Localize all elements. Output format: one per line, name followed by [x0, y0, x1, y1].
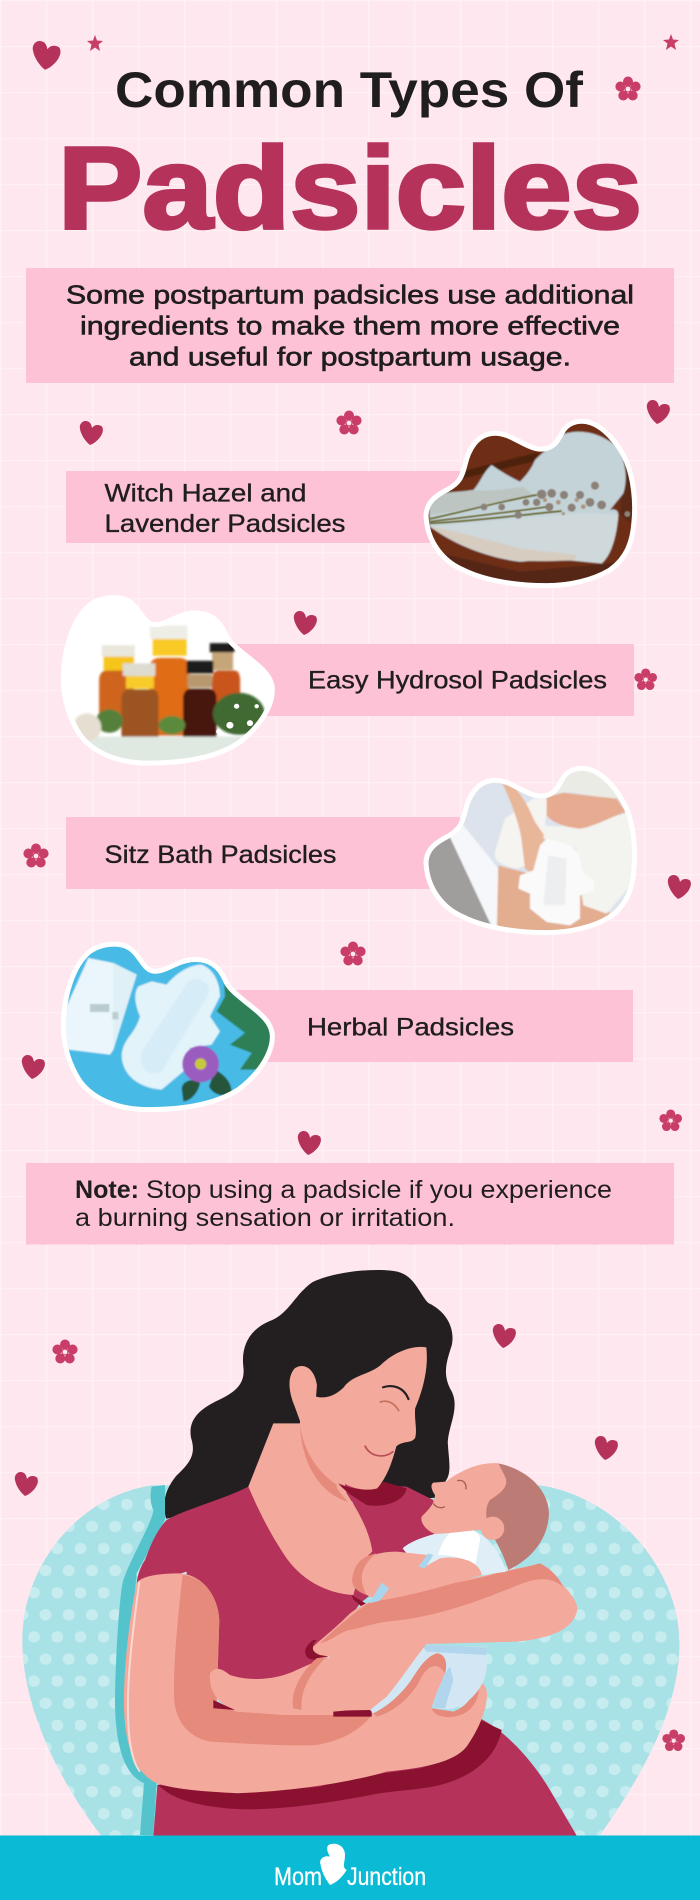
dress top: [137, 1483, 440, 1680]
title: Padsicles: [58, 123, 642, 253]
baby ear: [481, 1517, 504, 1540]
collar: [338, 1482, 407, 1506]
chest: [248, 1423, 372, 1595]
leg crease: [293, 1657, 327, 1710]
baby leg: [210, 1657, 373, 1715]
photo: hydrosol bottles: [58, 590, 280, 770]
illustration: mother holding baby on a dotted heart: [22, 1270, 679, 1838]
footer bar: [0, 1836, 700, 1900]
baby face: [433, 1480, 466, 1508]
panel: note: Stop using a padsicle if you experience: [146, 1176, 612, 1204]
skirt: [153, 1718, 577, 1837]
item: witch hazel and lavender padsicles: Lavender Padsicles: [104, 510, 346, 538]
item: herbal padsicles: Herbal Padsicles: [307, 1014, 514, 1042]
baby onesie top: [403, 1527, 507, 1575]
photo: pads with flower on blue: [55, 938, 282, 1115]
title: Common Types Of: [115, 62, 583, 118]
photo: pad held on towel: [420, 762, 647, 939]
photo: pad with lavender: [420, 415, 647, 592]
arms and baby: [124, 1463, 577, 1793]
baby hair: [486, 1463, 549, 1570]
panel: note: [26, 1163, 674, 1244]
item: herbal padsicles: [55, 938, 633, 1115]
item: easy hydrosol padsicles: [58, 590, 634, 770]
logo: MomJunction: Mom: [274, 1863, 322, 1891]
panel: intro text: Some postpartum padsicles use additional: [66, 280, 634, 310]
item: witch hazel and lavender padsicles: Witch Hazel and: [104, 480, 306, 508]
panel: intro text: and useful for postpartum usage.: [129, 342, 571, 372]
mother's lower arm: [124, 1573, 487, 1793]
item: sitz bath padsicles: Sitz Bath Padsicles: [104, 841, 336, 869]
mother's upper arm and hand: [303, 1567, 577, 1711]
logo: MomJunction: Junction: [347, 1863, 426, 1891]
baby cuffs: [369, 1553, 433, 1603]
teal dotted heart: [22, 1485, 679, 1838]
baby arm: [352, 1552, 482, 1600]
logo: MomJunction: [274, 1844, 426, 1891]
mother's body and baby: [115, 1423, 577, 1837]
face: [289, 1347, 427, 1502]
lower onesie: [370, 1647, 487, 1713]
mother's hair: [164, 1270, 455, 1519]
dress gaps: [213, 1700, 372, 1717]
hand shadows: [373, 1653, 479, 1717]
item: easy hydrosol padsicles: Easy Hydrosol Padsicles: [308, 666, 607, 694]
panel: note: Note:: [75, 1176, 139, 1204]
heart shadow strip: [115, 1485, 165, 1835]
item: witch hazel and lavender padsicles: [66, 415, 647, 592]
skirt shadow: [157, 1719, 502, 1809]
title: [58, 62, 642, 253]
panel: note: a burning sensation or irritation.: [75, 1204, 455, 1232]
item: sitz bath padsicles: [66, 762, 647, 939]
baby head: [421, 1463, 510, 1537]
lower arm shadow: [174, 1575, 373, 1745]
upper arm shadow: [320, 1563, 563, 1643]
panel: intro text: ingredients to make them more effective: [80, 310, 620, 340]
panel: intro text: [26, 268, 674, 383]
dark under hand: [305, 1595, 368, 1660]
